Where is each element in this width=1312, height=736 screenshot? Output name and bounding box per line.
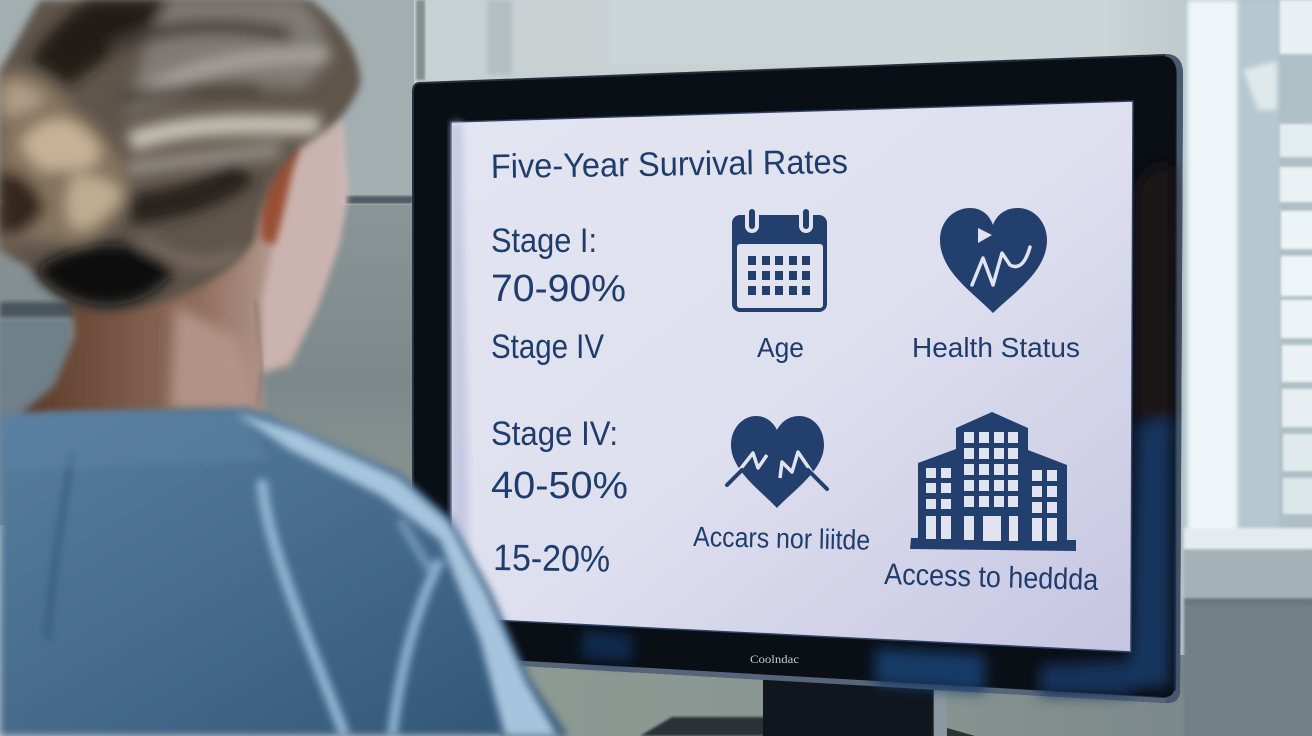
hair bun [0,71,131,250]
monitor frame [412,54,1183,703]
label: access to heddda: Access to heddda [884,558,1099,597]
window with shutters [1184,0,1312,736]
monitor brand label: Coolndac [750,652,799,666]
icon: calendar [732,206,827,312]
stat: stage IV colon: Stage IV: [491,415,618,453]
ear [261,146,300,245]
stat: 15-20%: 15-20% [493,537,610,580]
label: age: Age [757,332,804,363]
bezel reflections [582,165,1172,695]
icon: hospital building [910,412,1076,551]
stat: stage IV: Stage IV [491,328,604,366]
title: Five-Year Survival Rates [491,143,848,186]
label: accars nor liitde: Accars nor liitde [693,521,870,556]
screen [451,101,1133,652]
stat: stage I: Stage I: [491,222,597,260]
monitor stand [640,680,975,736]
icon: heart with pulse [940,208,1047,313]
icon: heart with mountain pulse [727,416,827,508]
person: hair [0,0,360,312]
label: health status: Health Status [912,332,1080,363]
stat: 70-90%: 70-90% [491,268,626,310]
stat: 40-50%: 40-50% [491,465,628,507]
person: neck and face [20,120,346,415]
person: blue shirt [0,408,568,736]
